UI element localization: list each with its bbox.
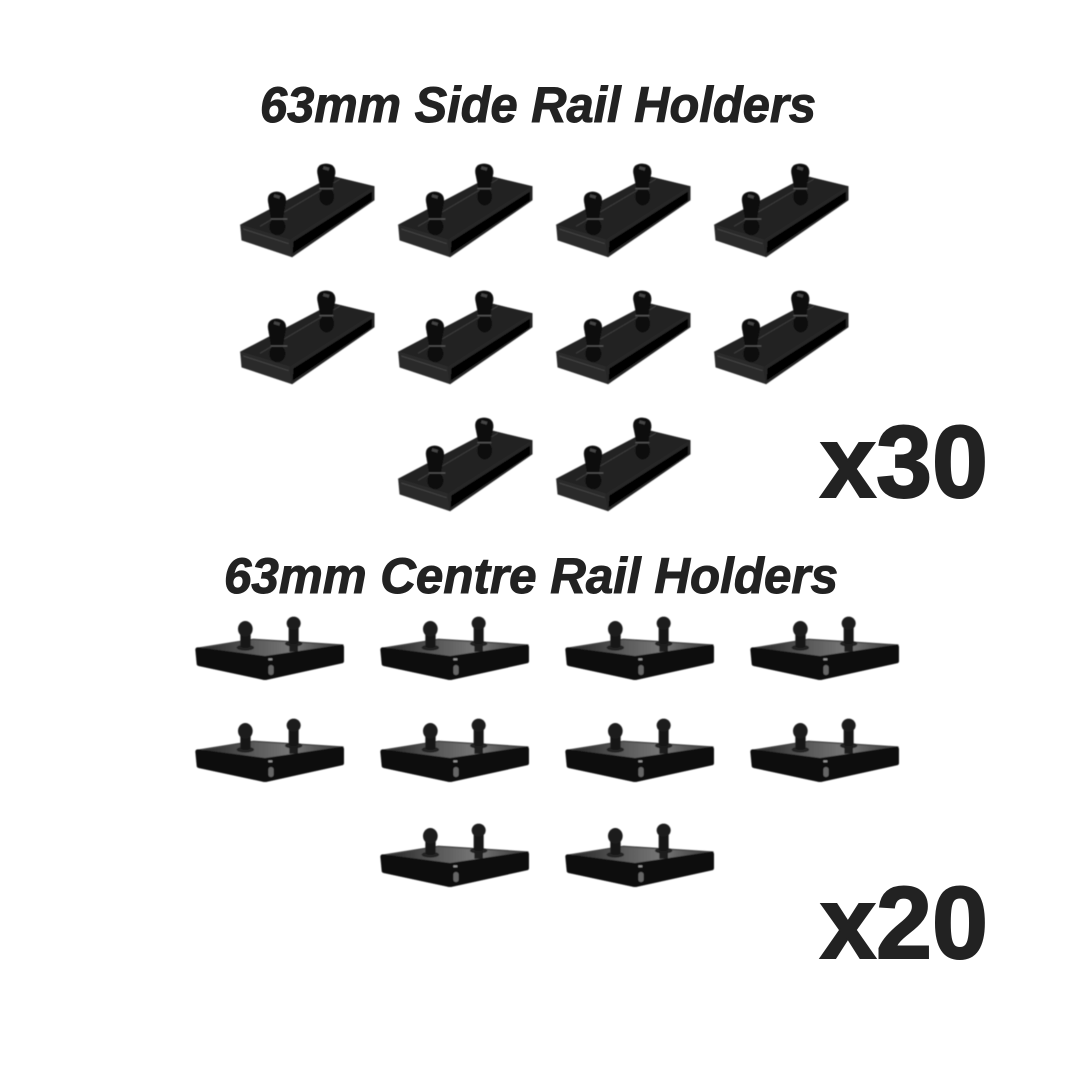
- centre holder 3: [567, 617, 713, 678]
- centre holder 4: [752, 617, 898, 678]
- side holder 2: [399, 164, 532, 257]
- quantity: x30: x30: [820, 405, 988, 519]
- centre holder 7: [567, 719, 713, 780]
- title: centre rail holders: 63mm Centre Rail Holders: [224, 548, 838, 604]
- side holder 1: [241, 164, 374, 257]
- side holder 6: [399, 291, 532, 384]
- centre rail holders group: [197, 617, 898, 885]
- centre holder 8: [752, 719, 898, 780]
- side rail holders group: [241, 164, 848, 511]
- side holder 7: [557, 291, 690, 384]
- side holder 9: [399, 418, 532, 511]
- centre holder 9: [382, 824, 528, 885]
- centre holder 2: [382, 617, 528, 678]
- side holder 4: [715, 164, 848, 257]
- centre holder 10: [567, 824, 713, 885]
- centre holder 1: [197, 617, 343, 678]
- side holder 8: [715, 291, 848, 384]
- side holder 3: [557, 164, 690, 257]
- quantity: x20: x20: [820, 866, 988, 980]
- side holder 5: [241, 291, 374, 384]
- centre holder 5: [197, 719, 343, 780]
- centre holder 6: [382, 719, 528, 780]
- title: side rail holders: 63mm Side Rail Holders: [260, 77, 816, 133]
- side holder 10: [557, 418, 690, 511]
